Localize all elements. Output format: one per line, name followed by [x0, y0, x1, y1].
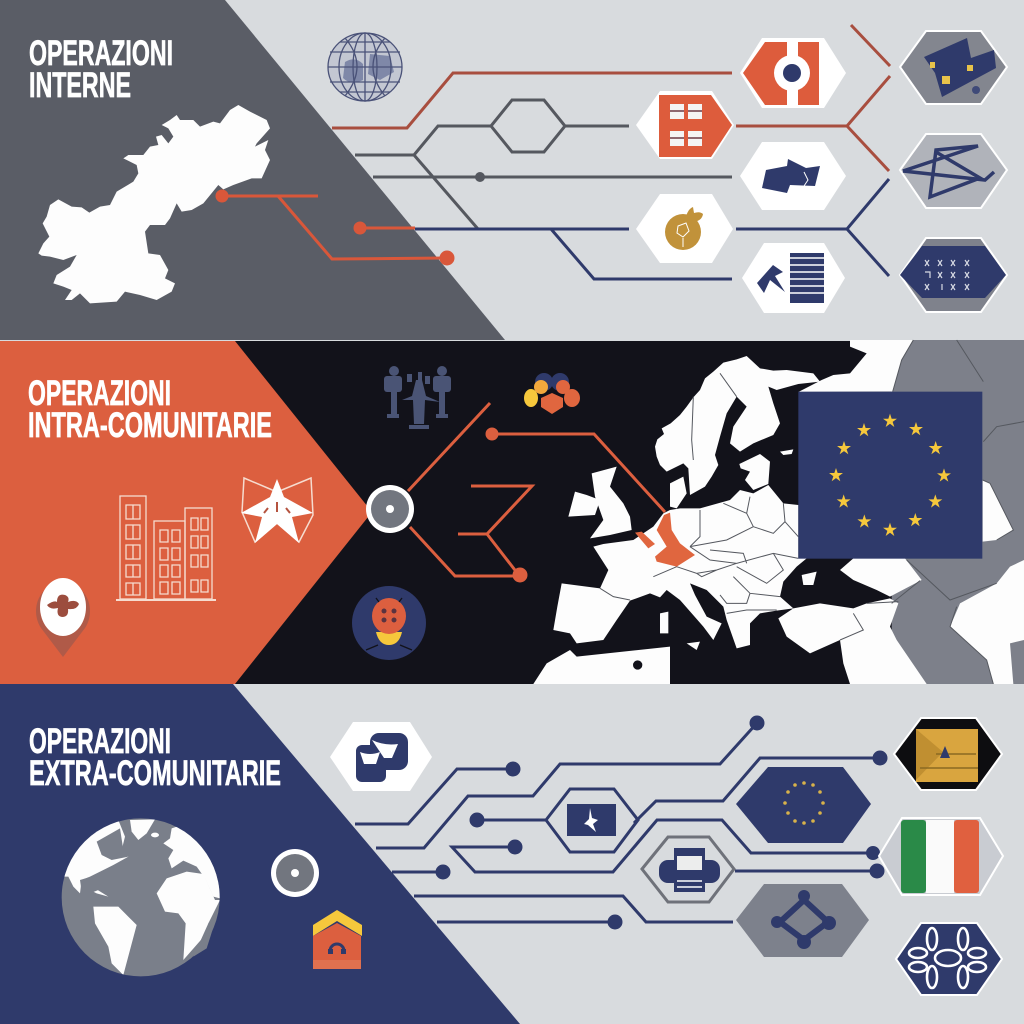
icon: italian flag hexagon: [879, 818, 1003, 895]
icon: triangles hexagon: [900, 134, 1007, 208]
icon: star hexagon outline: [546, 789, 638, 852]
icon: navy arrow hexagon: [740, 142, 846, 210]
panel: operazioni extra-comunitarie: [0, 684, 1024, 1024]
icon: people: [384, 366, 451, 429]
panel: operazioni intra-comunitarie: [0, 340, 1024, 684]
icon: eu hexagon: [736, 767, 871, 843]
icon: location pin: [36, 578, 90, 657]
connector lines: map to network: [217, 191, 453, 264]
map: europe: [533, 340, 1024, 684]
icon: gold envelope hexagon: [894, 718, 1002, 790]
icon: gray card hexagon: [900, 31, 1007, 104]
icon: puzzle hexagon: [330, 722, 432, 791]
heading: operazioni interne: [29, 34, 173, 105]
icon: navy pattern hexagon: [900, 238, 1007, 312]
icon: world globe: [62, 818, 220, 976]
heading: operazioni intra-comunitarie: INTRA-COMUNITARIE: [28, 406, 272, 445]
icon: wire globe: [328, 33, 402, 101]
icon: house with headset: [313, 910, 362, 969]
heading: operazioni intra-comunitarie: OPERAZIONI: [28, 374, 171, 413]
heading: operazioni extra-comunitarie: EXTRA-COMUNITARIE: [29, 754, 281, 793]
icon: red building hexagon: [636, 91, 734, 159]
network lines: interne: [332, 25, 890, 279]
eu flag: [798, 392, 982, 559]
icon: navy flower hexagon: [896, 923, 1002, 995]
highlighted region: orange: [635, 513, 695, 567]
icon: office buildings: [116, 496, 216, 600]
icon: flower shape: [524, 373, 580, 414]
heading: operazioni extra-comunitarie: [29, 722, 281, 793]
icon: documents hexagon: [742, 243, 845, 313]
icon: ladybird circle: [352, 586, 426, 660]
icon: printer hexagon: [642, 837, 734, 902]
heading: operazioni interne: OPERAZIONI: [29, 34, 173, 73]
network lines: extra: [355, 717, 886, 928]
heading: operazioni interne: INTERNE: [29, 66, 131, 105]
icon: star network: [241, 478, 313, 543]
icon: gray knot hexagon: [736, 884, 869, 957]
icon: red hexagon with navy dot: [740, 38, 846, 108]
icon: hub circle: [366, 485, 414, 533]
map: italy silhouette: [38, 105, 270, 303]
heading: operazioni intra-comunitarie: [28, 374, 272, 445]
icon: hub circle: [271, 849, 319, 897]
connector lines: intra: [408, 403, 665, 581]
heading: operazioni extra-comunitarie: OPERAZIONI: [29, 722, 171, 761]
panel: operazioni interne: [0, 0, 1024, 340]
icon: ochre blob hexagon: [636, 194, 733, 263]
